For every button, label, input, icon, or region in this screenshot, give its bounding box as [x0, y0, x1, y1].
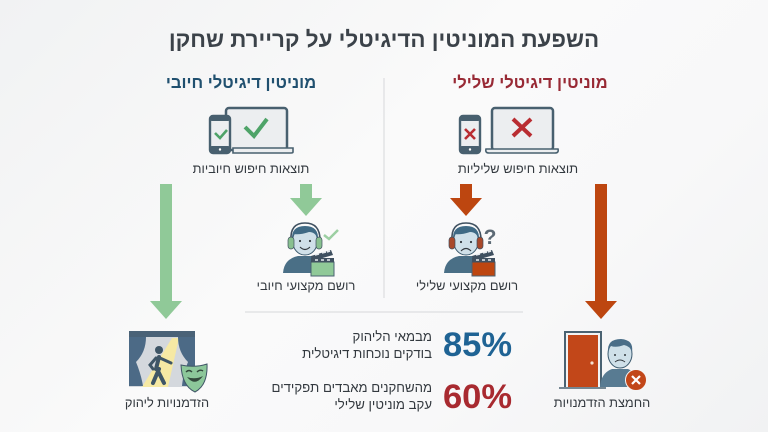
stat text: casting directors: מבמאי הליהוק: [353, 329, 432, 344]
stat text: casting directors: [302, 329, 432, 361]
stat text: casting directors: בודקים נוכחות דיגיטלית: [302, 346, 432, 361]
arrow: long red: [585, 184, 617, 319]
icon: devices with check marks: [210, 108, 293, 153]
label: negative professional impression: רושם מקצועי שלילי: [416, 278, 518, 293]
icon: stage with spotlight and comedy mask: [129, 331, 207, 392]
arrow: short red: [450, 184, 482, 216]
title: השפעת המוניטין הדיגיטלי על קריירת שחקן: [169, 27, 599, 52]
arrow: short green: [290, 184, 322, 216]
icon: devices with x marks: [460, 108, 558, 153]
stat text: actors losing roles: [272, 380, 432, 412]
stat: 60 percent: 60%: [443, 378, 512, 416]
label: acting opportunities: הזדמנויות ליהוק: [125, 395, 209, 410]
stat: 85 percent: 85%: [443, 326, 512, 364]
icon: closed door with sad person: [559, 332, 646, 390]
icon: negative actor with headset and clapperboard: [444, 223, 496, 276]
stat text: actors losing roles: מהשחקנים מאבדים תפקידים: [272, 380, 432, 395]
heading: positive reputation: מוניטין דיגיטלי חיובי: [166, 73, 316, 92]
label: negative search results: תוצאות חיפוש שליליות: [458, 161, 578, 176]
icon: negative actor with headset and clapperboard: ?: [484, 226, 496, 249]
label: missed opportunities: החמצת הזדמנויות: [554, 395, 650, 410]
label: positive search results: תוצאות חיפוש חיוביות: [193, 161, 309, 176]
heading: negative reputation: מוניטין דיגיטלי שלילי: [452, 73, 608, 92]
arrow: long green: [150, 184, 182, 319]
icon: positive actor with headset and clapperboard: [283, 223, 338, 276]
label: positive professional impression: רושם מקצועי חיובי: [257, 278, 355, 293]
stat text: actors losing roles: עקב מוניטין שלילי: [334, 397, 432, 412]
